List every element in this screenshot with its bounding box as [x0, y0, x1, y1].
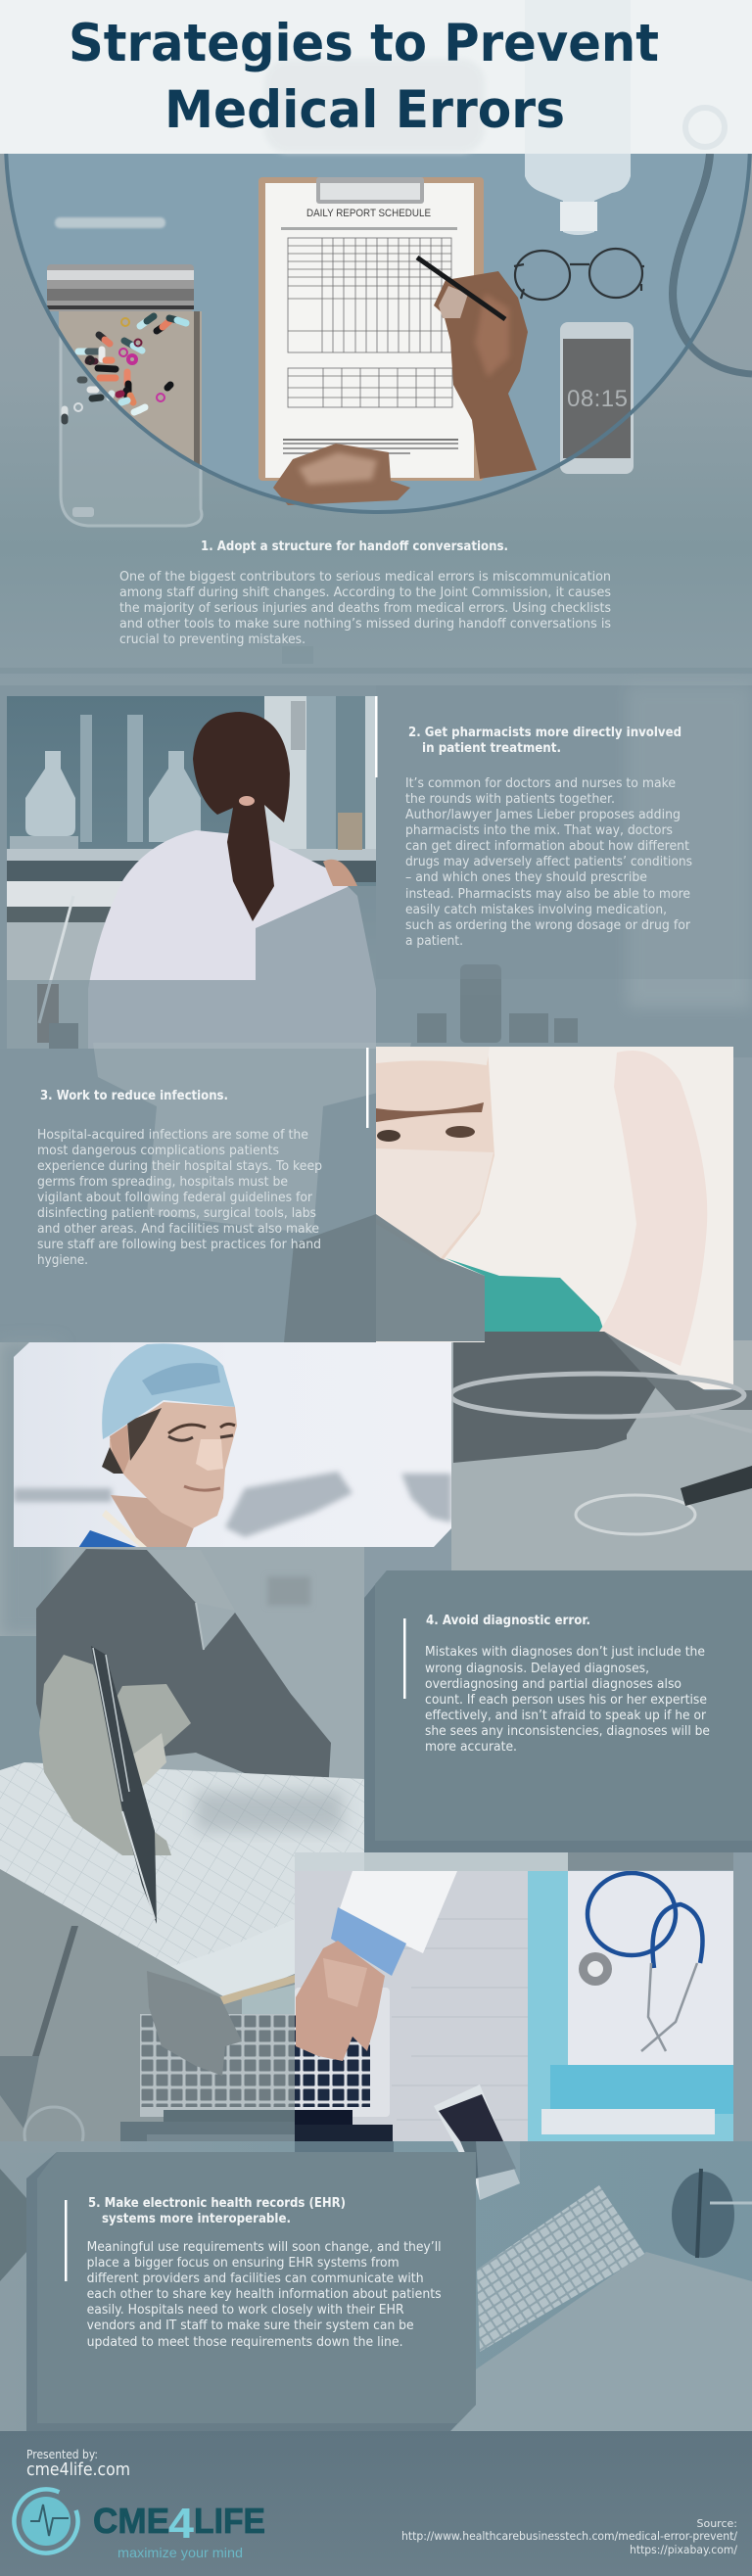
- body: section 3: sure staff are following best practices for hand: [37, 1238, 321, 1252]
- body: section 1: and other tools to make sure nothing’s missed during handoff conversations is: [119, 617, 611, 632]
- photo: surgeon: [14, 1342, 451, 1548]
- icon: clipboard with schedule: [258, 177, 484, 481]
- photo: nurse with mask: [376, 1047, 733, 1389]
- body: section 4: wrong diagnosis. Delayed diagnoses,: [425, 1662, 649, 1676]
- body: section 2: a patient.: [405, 934, 463, 949]
- body: section 4: [425, 1645, 710, 1755]
- heading: section 5: [88, 2196, 346, 2226]
- source: http://www.healthcarebusinesstech.com/medical-error-prevent/: [401, 2529, 737, 2543]
- heading: section 4: 4. Avoid diagnostic error.: [426, 1614, 590, 1628]
- body: section 2: drugs may adversely affect patients’ conditions: [405, 855, 692, 869]
- body: section 2: Author/lawyer James Lieber proposes adding: [405, 808, 681, 822]
- heading: section 2: 2. Get pharmacists more directly involved: [408, 726, 682, 740]
- body: section 4: count. If each person uses his or her expertise: [425, 1693, 707, 1708]
- body: section 2: can get direct information about how different: [405, 839, 689, 854]
- ghost hand: [39, 1655, 191, 1855]
- icon: metal tray: [47, 264, 202, 466]
- panel: section 3: [0, 1043, 752, 1570]
- presented by: [26, 2447, 130, 2480]
- logo: CME4LIFE: [5, 2480, 265, 2562]
- body: section 5: Meaningful use requirements will soon change, and they’ll: [87, 2240, 442, 2255]
- ghost desk lower left: [0, 1869, 295, 2154]
- ghost laptop lid: [295, 2141, 394, 2153]
- circle contents: [47, 154, 750, 466]
- ghost bottom item: [282, 646, 313, 664]
- hand: [296, 1941, 385, 2061]
- wordmark: CME: [93, 2501, 169, 2541]
- icon: pills: [65, 316, 186, 421]
- panel: left doctor collage: [0, 1342, 364, 2141]
- sleeve and cuff: [338, 1871, 457, 1953]
- panel: section 4: [364, 1570, 752, 1852]
- ghost stethoscope tube outside circle: [673, 154, 752, 374]
- body: section 2: – and which ones they should prescribe: [405, 870, 647, 885]
- hair and ponytail: [193, 712, 290, 921]
- ghost scarf: [284, 1214, 485, 1342]
- accent bar: [403, 1618, 405, 1699]
- icon: writing hand and pen: [417, 258, 537, 479]
- icon: eyeglasses: [514, 249, 644, 300]
- wordmark: LIFE: [194, 2501, 265, 2541]
- footer: [0, 2431, 752, 2576]
- translucent overlay on photo lower corner: [376, 1214, 485, 1341]
- icon: heartbeat circle: [5, 2480, 87, 2562]
- circle backdrop: [6, 0, 750, 512]
- wordmark: [93, 2500, 265, 2548]
- body: section 5: different providers and facilities can communicate with: [87, 2272, 424, 2286]
- panel: bottom desk background: [0, 2141, 752, 2431]
- ghost pen: [91, 1646, 157, 1924]
- source: https://pixabay.com/: [630, 2543, 737, 2556]
- icon: smartphone: [560, 322, 634, 474]
- icon: phone on desk: [434, 2084, 520, 2200]
- ghost bottles: [417, 964, 578, 1043]
- presented by: cme4life.com: [26, 2459, 130, 2480]
- body: section 2: It’s common for doctors and nurses to make: [405, 776, 676, 791]
- body: section 4: overdiagnosing and partial diagnoses also: [425, 1677, 682, 1692]
- ghost doctor torso: [36, 1549, 331, 1794]
- body: section 3: vigilant about following federal guidelines for: [37, 1191, 313, 1205]
- laptop shadow: [295, 2110, 352, 2125]
- icon: keyboard: [477, 2185, 645, 2352]
- icon: smartphone: 08:15: [567, 386, 628, 412]
- body: section 3: and other areas. And facilities must also make: [37, 1222, 319, 1237]
- body: section 4: she sees any inconsistencies, diagnoses will be: [425, 1724, 710, 1739]
- ghost laptop and hand: [0, 1971, 295, 2162]
- tagline: maximize your mind: [118, 2545, 243, 2560]
- panel: section 5: [26, 2152, 476, 2431]
- heading: title text: Medical Errors: [164, 80, 565, 140]
- text block: section 1: [119, 539, 611, 647]
- heading: section 1: 1. Adopt a structure for handoff conversations.: [201, 539, 508, 554]
- title band: [0, 0, 752, 154]
- body: section 1: crucial to preventing mistakes.: [119, 632, 306, 647]
- body: section 4: Mistakes with diagnoses don’t just include the: [425, 1645, 705, 1660]
- ghost notepad: [0, 2169, 26, 2281]
- photo: doctor at laptop with stethoscope: [295, 1852, 752, 2200]
- photo: woman in lab: [7, 696, 376, 1053]
- neck and face: [111, 1495, 194, 1547]
- body: section 4: more accurate.: [425, 1740, 517, 1755]
- heading: title text: Strategies to Prevent: [69, 14, 659, 73]
- icon: clipboard with schedule: DAILY REPORT SCHEDULE: [306, 208, 431, 219]
- ghost schedule sheet: [0, 1762, 364, 1996]
- body: section 2: instead. Pharmacists may also be able to more: [405, 887, 690, 902]
- icon: ghost tray outside circle: [61, 311, 202, 526]
- scrubs: [78, 1530, 137, 1547]
- heading: section 5: systems more interoperable.: [102, 2212, 291, 2226]
- body: section 2: easily catch mistakes involving medication,: [405, 903, 667, 917]
- panel: hero photo with circle: [0, 154, 752, 674]
- heading: section 2: [408, 726, 682, 756]
- body: section 3: disinfecting patient rooms, surgical tools, labs: [37, 1206, 316, 1221]
- stethoscope: [588, 1873, 703, 1968]
- presented by: Presented by:: [26, 2447, 98, 2461]
- cap: [102, 1343, 235, 1439]
- heading: title text: [69, 14, 659, 140]
- body: section 3: germs from spreading, hospitals must be: [37, 1175, 288, 1190]
- wordmark: 4: [168, 2500, 195, 2548]
- flasks: [25, 751, 75, 836]
- heading: section 3: 3. Work to reduce infections.: [40, 1089, 228, 1103]
- panel: section 2 translucent overlay: [376, 685, 752, 979]
- body: section 5: updated to meet those requirements down the line.: [87, 2335, 403, 2350]
- icon: ghost stethoscope: [450, 1332, 752, 1534]
- body: section 5: easily. Hospitals need to work closely with their EHR: [87, 2303, 404, 2318]
- icon: pencil cup: [672, 2169, 752, 2258]
- body: section 5: vendors and IT staff to make sure their system can be: [87, 2318, 414, 2333]
- body: section 2: the rounds with patients together.: [405, 792, 615, 807]
- body: section 3: Hospital-acquired infections are some of the: [37, 1128, 308, 1143]
- source: [401, 2517, 737, 2556]
- body: section 5: each other to share key health information about patients: [87, 2287, 442, 2302]
- icon: IV bag: [525, 147, 631, 235]
- body: section 3: most dangerous complications patients: [37, 1144, 279, 1158]
- body: section 2: such as ordering the wrong dosage or drug for: [405, 918, 691, 933]
- panel: lab background: [0, 685, 752, 1057]
- accent bar: [65, 2200, 67, 2281]
- laptop: [295, 1988, 390, 2117]
- body: section 2: [405, 776, 692, 949]
- folder: [528, 1871, 733, 2141]
- circle ring: [6, 0, 750, 512]
- body: section 1: [119, 570, 611, 647]
- coat: [88, 830, 376, 1049]
- source: Source:: [697, 2517, 737, 2530]
- body: section 2: pharmacists into the mix. That way, doctors: [405, 823, 673, 838]
- stethoscope photo base: [451, 1332, 752, 1570]
- body: section 4: effectively, and isn’t afraid to speak up if he or: [425, 1709, 707, 1723]
- heading: section 5: 5. Make electronic health records (EHR): [88, 2196, 346, 2211]
- ghost woman coat: [93, 1043, 411, 1234]
- icon: lower hand: [273, 444, 410, 505]
- body: section 3: [37, 1128, 322, 1268]
- heading: section 2: in patient treatment.: [422, 741, 561, 756]
- body: section 3: experience during their hospital stays. To keep: [37, 1159, 322, 1174]
- body: section 3: hygiene.: [37, 1253, 88, 1268]
- body: section 5: [87, 2240, 442, 2350]
- body: section 5: place a bigger focus on ensuring EHR systems from: [87, 2256, 400, 2271]
- body: section 1: among staff during shift changes. According to the Joint Commission, it causes: [119, 585, 611, 600]
- body: section 1: the majority of serious injuries and deaths from medical errors. Using checklists: [119, 601, 611, 616]
- body: section 1: One of the biggest contributors to serious medical errors is miscommunication: [119, 570, 611, 585]
- accent bar: [375, 696, 378, 777]
- icon: stethoscope tube: [669, 154, 714, 346]
- icon: thermometer: [55, 217, 165, 228]
- accent bar: [366, 1048, 368, 1128]
